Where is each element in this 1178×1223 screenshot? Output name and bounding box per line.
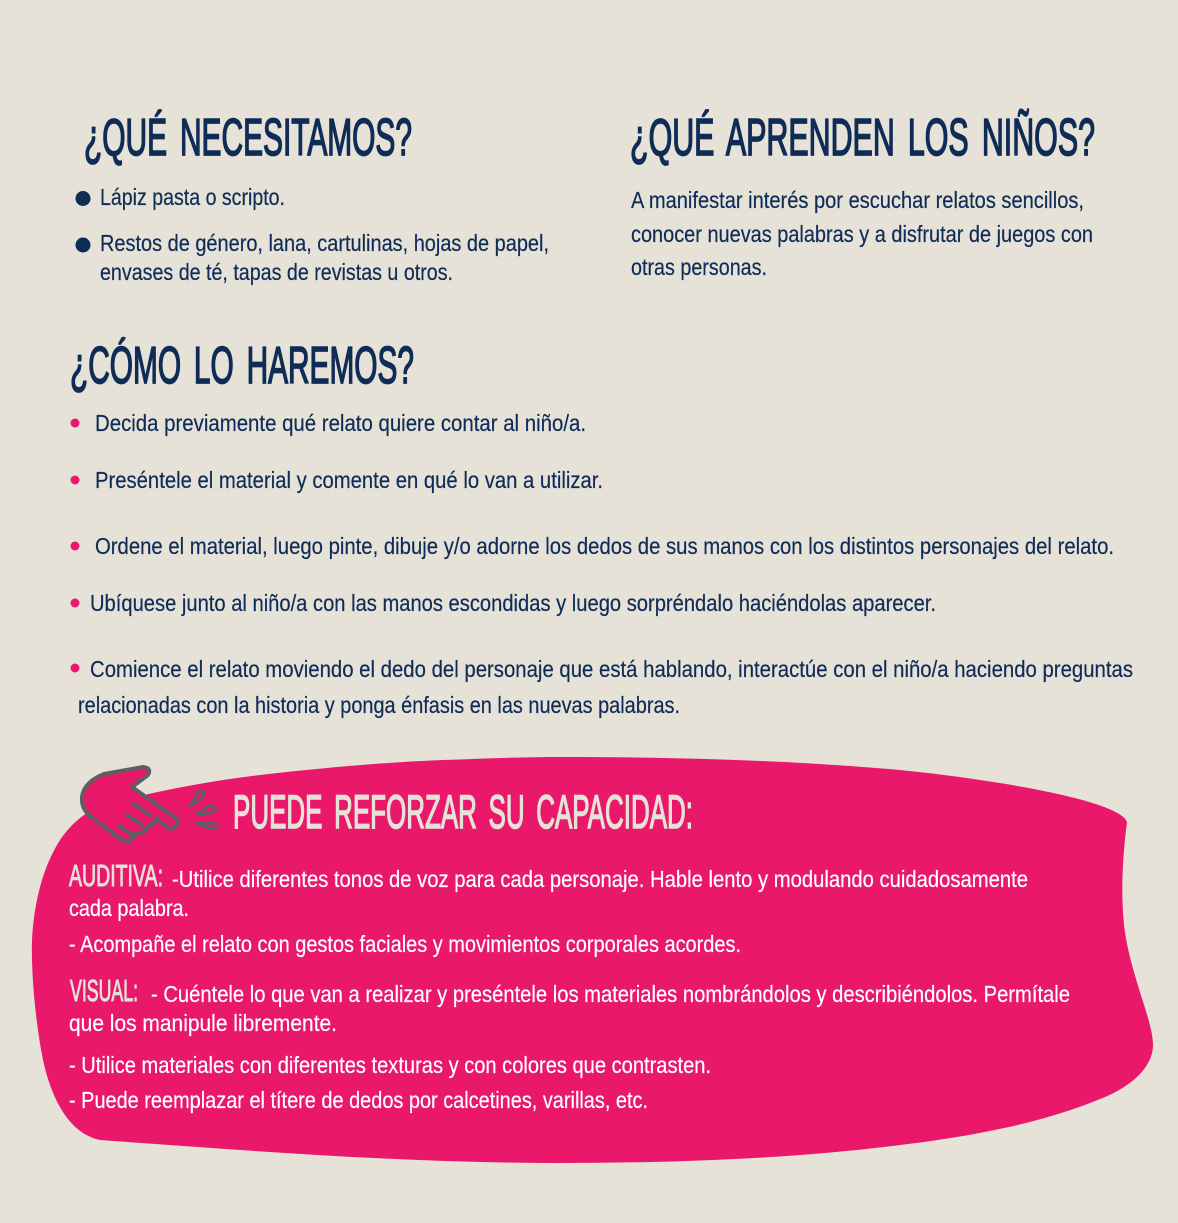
text: visual: - Puede reemplazar el títere de dedos por calcetines, varillas, etc. [69,1087,648,1113]
pink blob background [32,757,1153,1163]
text: auditiva: cada palabra. [69,895,189,921]
panel: que necesitamos [76,109,549,285]
materials list: Restos de género, lana, cartulinas, hojas de papel, [100,230,549,256]
steps list: relacionadas con la historia y ponga énfasis en las nuevas palabras. [78,692,680,718]
steps list: Preséntele el material y comente en qué lo van a utilizar. [95,467,603,493]
panel: que aprenden los ninos [630,109,1095,280]
steps list: Ubíquese junto al niño/a con las manos escondidas y luego sorpréndalo haciéndolas aparecer. [90,590,936,616]
learning text: conocer nuevas palabras y a disfrutar de juegos con [631,221,1093,247]
heading: puede reforzar: PUEDE REFORZAR SU CAPACIDAD: [233,785,693,838]
steps list: Decida previamente qué relato quiere contar al niño/a. [95,410,586,436]
learning text: otras personas. [631,254,767,280]
learning text: A manifestar interés por escuchar relatos sencillos, [631,187,1084,213]
steps list [70,410,1133,718]
heading: como lo haremos: ¿CÓMO LO HAREMOS? [70,337,414,395]
panel: puede reforzar su capacidad [32,757,1153,1163]
text: auditiva: - Acompañe el relato con gestos faciales y movimientos corporales acordes. [69,931,741,957]
text: auditiva: -Utilice diferentes tonos de voz para cada personaje. Hable lento y modulando cuidadosamente [172,866,1028,892]
heading: que necesitamos: ¿QUÉ NECESITAMOS? [84,109,412,167]
panel: como lo haremos [70,337,1133,718]
text: visual [69,973,1070,1113]
materials list [76,184,549,285]
text: auditiva [69,858,1028,957]
materials list: Lápiz pasta o scripto. [100,184,285,210]
icon: emphasis marks [190,790,217,828]
materials list: envases de té, tapas de revistas u otros. [100,259,453,285]
learning text [631,187,1093,280]
text: visual: VISUAL: [70,973,138,1008]
text: visual: que los manipule libremente. [69,1010,337,1036]
text: visual: - Utilice materiales con diferentes texturas y con colores que contrasten. [69,1052,711,1078]
text: auditiva: AUDITIVA: [69,858,163,893]
icon: pointing hand [82,767,177,841]
